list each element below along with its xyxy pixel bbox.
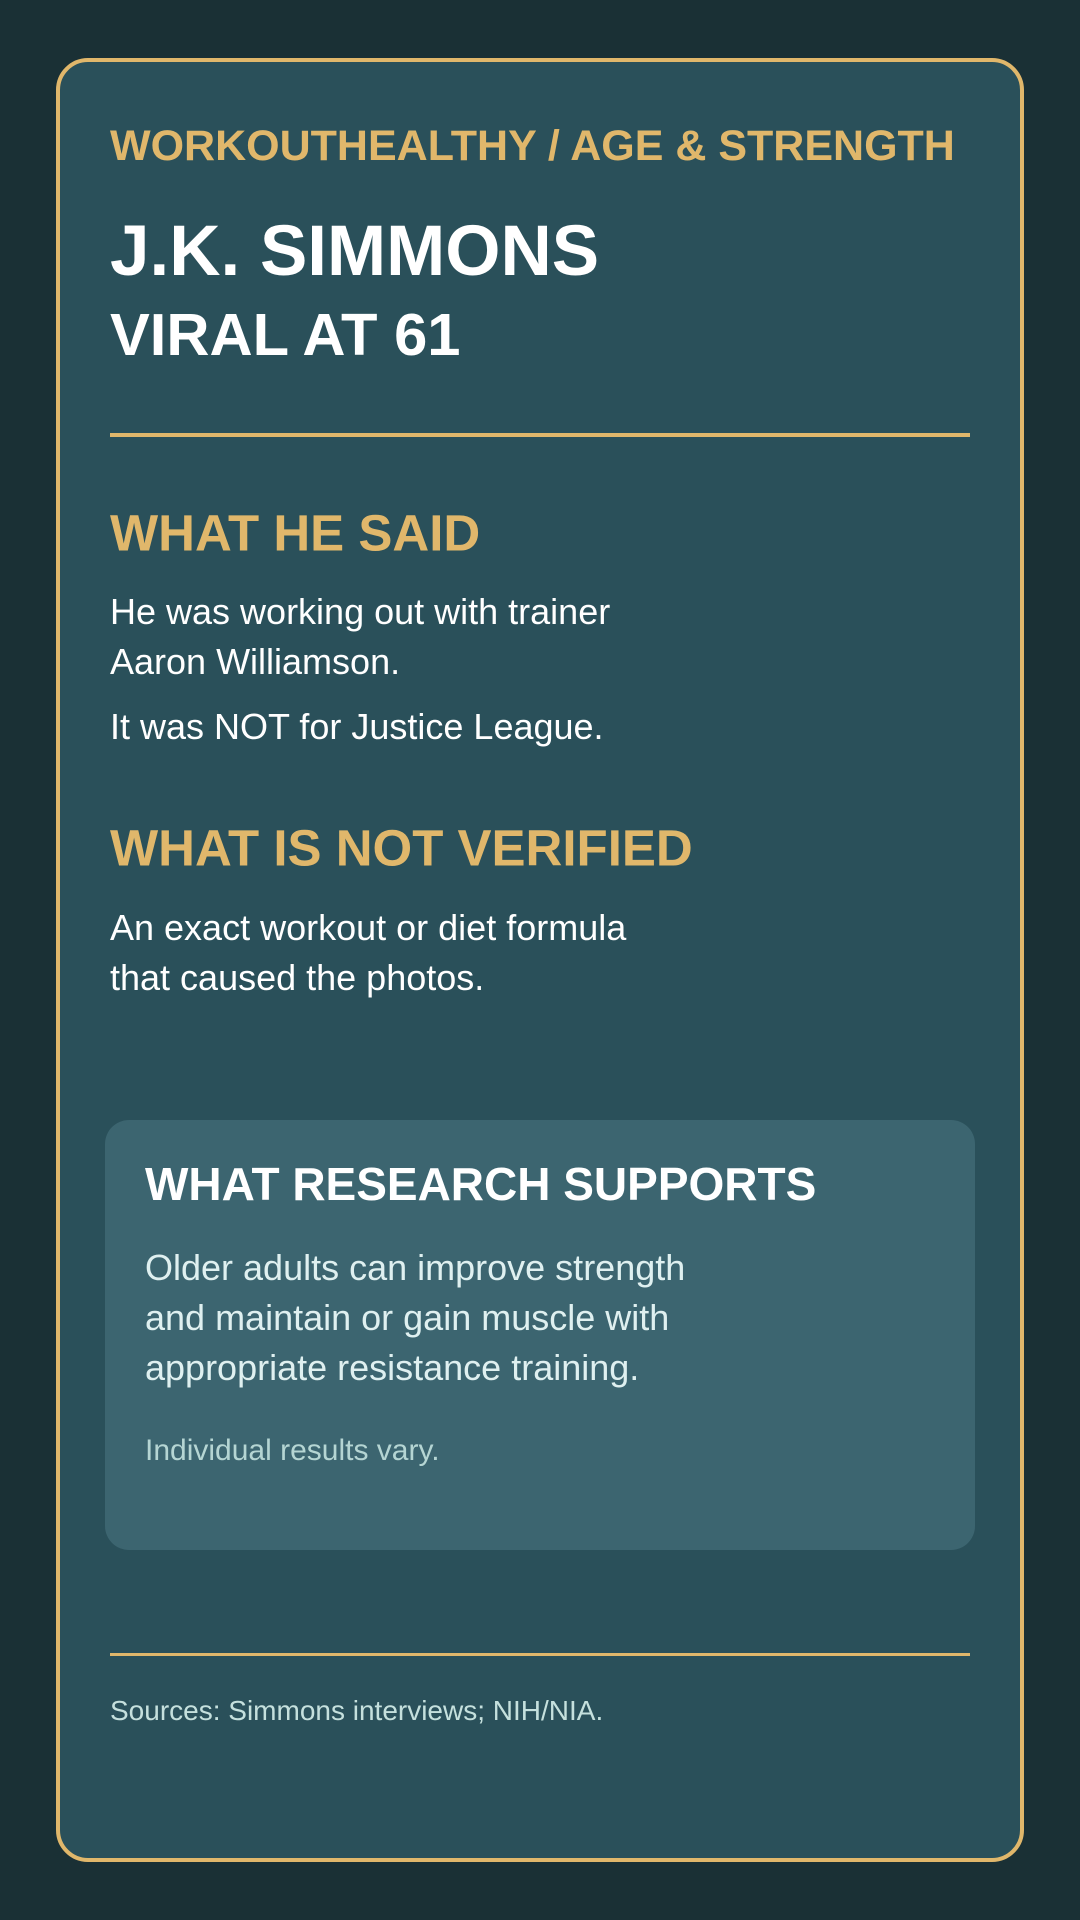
text: not verified body bbox=[110, 907, 627, 998]
text: what he said body bbox=[110, 591, 610, 747]
title bbox=[110, 212, 599, 368]
heading: what is not verified: WHAT IS NOT VERIFIED bbox=[110, 820, 693, 876]
section: what he said bbox=[110, 504, 610, 747]
panel: what research supports bbox=[105, 1120, 975, 1550]
heading: what research supports: WHAT RESEARCH SUPPORTS bbox=[145, 1158, 816, 1210]
text: research body bbox=[145, 1247, 685, 1388]
text: caveat: Individual results vary. bbox=[145, 1434, 440, 1467]
eyebrow heading: WORKOUTHEALTHY / AGE & STRENGTH bbox=[110, 122, 955, 170]
text: what he said body: It was NOT for Justice League. bbox=[110, 706, 604, 747]
title: J.K. SIMMONS bbox=[110, 212, 599, 291]
title: VIRAL AT 61 bbox=[110, 301, 460, 368]
text: not verified body: An exact workout or diet formula bbox=[110, 907, 627, 948]
section: what is not verified bbox=[110, 820, 693, 998]
text: not verified body: that caused the photos. bbox=[110, 957, 484, 998]
text: research body: and maintain or gain muscle with bbox=[145, 1297, 669, 1338]
text: research body: appropriate resistance training. bbox=[145, 1347, 639, 1388]
text: what he said body: He was working out with trainer bbox=[110, 591, 610, 632]
text: research body: Older adults can improve strength bbox=[145, 1247, 685, 1288]
text: what he said body: Aaron Williamson. bbox=[110, 641, 400, 682]
text: sources: Sources: Simmons interviews; NIH/NIA. bbox=[110, 1695, 603, 1726]
heading: what he said: WHAT HE SAID bbox=[110, 504, 480, 562]
